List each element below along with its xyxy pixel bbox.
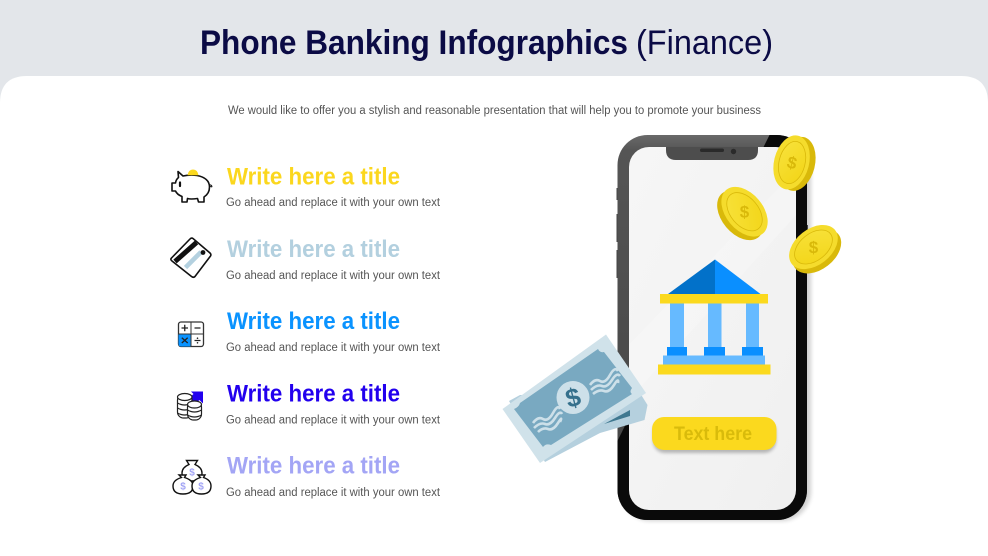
title: Phone Banking Infographics	[200, 24, 628, 62]
list item 5: money bags	[173, 452, 441, 499]
title: (Finance)	[636, 24, 773, 62]
icon: calculator	[178, 322, 204, 346]
icon: money bags: $	[180, 482, 186, 492]
dollar sign: $	[562, 381, 584, 414]
roof	[668, 260, 715, 294]
description: Go ahead and replace it with your own text	[226, 487, 441, 499]
foundation	[658, 364, 770, 374]
phone side buttons	[616, 188, 808, 278]
screen gloss	[629, 170, 796, 400]
description: Go ahead and replace it with your own text	[226, 270, 441, 282]
heading: Write here a title	[227, 164, 400, 190]
wavy lines	[533, 369, 620, 432]
top bill	[502, 334, 646, 463]
icon: bank building	[658, 260, 770, 374]
list item 1: piggy bank	[172, 164, 441, 209]
bill seal	[556, 381, 590, 414]
phone	[612, 130, 812, 525]
list item 2: credit card	[171, 236, 441, 282]
icon: money bags: $	[198, 482, 204, 492]
camera	[731, 149, 736, 154]
description: Go ahead and replace it with your own text	[226, 197, 441, 209]
icon: coin middle	[708, 178, 777, 249]
plinth	[663, 356, 765, 364]
button shadow	[653, 420, 776, 453]
heading: Write here a title	[227, 452, 400, 480]
icon: coin stacks with arrow	[178, 392, 203, 420]
button label: Text here	[674, 424, 752, 445]
heading: Write here a title	[227, 236, 400, 263]
notch	[666, 147, 758, 160]
subtitle: We would like to offer you a stylish and reasonable presentation that will help you to promote your business	[228, 105, 761, 117]
button shape	[652, 417, 776, 450]
phone dark reflection	[612, 130, 812, 525]
heading: Write here a title	[227, 308, 400, 335]
icon: coin top	[768, 131, 821, 195]
list item 3: calculator	[178, 308, 441, 354]
column bases	[667, 347, 763, 356]
icon: money bags	[173, 460, 211, 494]
phone screen	[629, 147, 796, 510]
icon: money bags: $	[189, 468, 195, 478]
icon: piggy bank	[172, 170, 212, 202]
bill print	[514, 349, 632, 447]
icon: coin right: $	[809, 238, 819, 257]
speaker	[700, 148, 724, 152]
phone shadow	[621, 139, 811, 521]
button	[652, 417, 776, 453]
beam	[660, 294, 768, 304]
phone body	[618, 135, 807, 520]
lower bills	[509, 393, 648, 462]
icon: coin top: $	[785, 153, 799, 173]
icon: credit card	[171, 238, 211, 277]
icon: cash bills	[502, 334, 648, 463]
description: Go ahead and replace it with your own text	[226, 414, 441, 426]
description: Go ahead and replace it with your own text	[226, 342, 441, 354]
heading: Write here a title	[227, 380, 400, 408]
columns	[670, 304, 759, 347]
icon: coin right	[781, 216, 850, 282]
icon: coin middle: $	[740, 203, 750, 222]
list item 4: coins and arrow	[178, 380, 441, 426]
